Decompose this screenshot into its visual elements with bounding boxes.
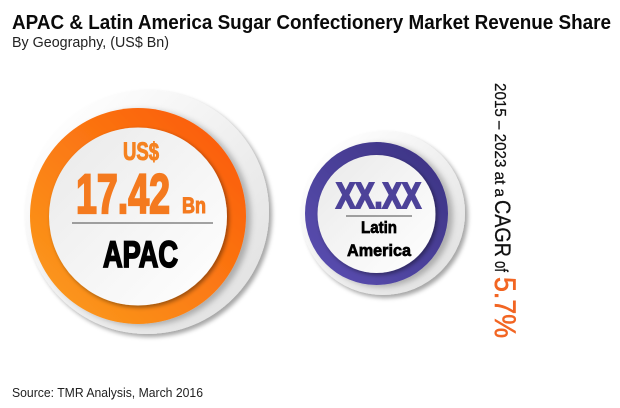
region label: APAC [103,234,178,275]
region label [347,218,412,260]
subtitle: By Geography, (US$ Bn) [12,35,169,51]
CAGR vertical callout [488,83,521,338]
value: XX.XX [336,175,421,216]
purple ring [305,142,448,285]
CAGR vertical callout: 5.7% [488,277,521,338]
inner face [318,155,436,273]
CAGR vertical callout: CAGR [490,200,515,257]
source note: Source: TMR Analysis, March 2016 [12,385,203,400]
inner face [49,128,227,306]
CAGR vertical callout: 2015 – 2023 at a [491,83,508,197]
panel: APAC circle [25,90,269,334]
region label: Latin [361,218,397,237]
unit: Bn [182,193,206,218]
outer disc [25,90,269,334]
outer disc [301,131,465,295]
value: 17.42 [76,162,170,225]
CAGR vertical callout: of [491,261,511,273]
panel: Latin America circle [301,131,465,295]
region label: America [347,241,412,260]
currency label: US$ [123,138,159,166]
orange ring [30,108,246,324]
